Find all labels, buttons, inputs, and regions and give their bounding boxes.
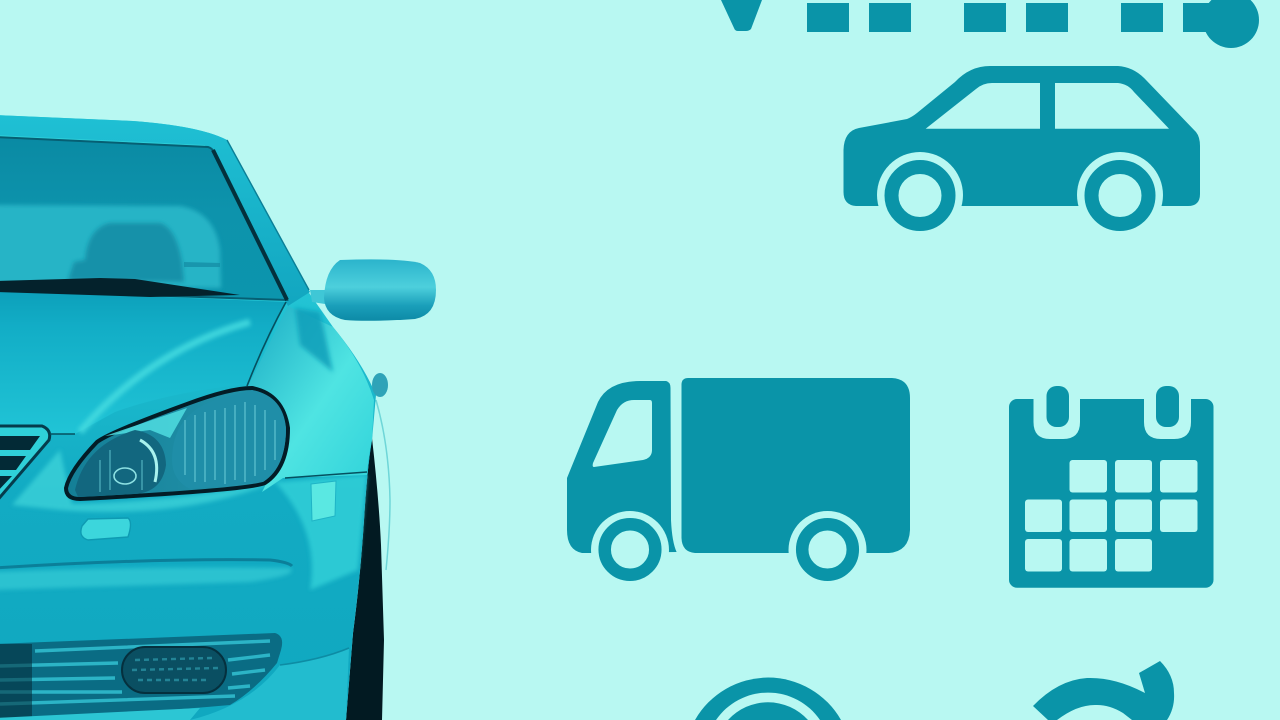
car body	[0, 115, 376, 720]
lower grille	[0, 633, 282, 718]
map pin tip	[721, 0, 762, 31]
fender side marker	[311, 481, 336, 521]
route line with pin and destination dot	[721, 0, 1259, 48]
date cells	[1025, 460, 1198, 572]
washer cover	[81, 518, 130, 540]
teal car photo	[0, 115, 436, 720]
lower fender light	[275, 475, 367, 590]
binder rings	[1046, 386, 1179, 427]
seat	[68, 223, 184, 282]
roof and pillar	[0, 115, 310, 306]
truck cargo box	[682, 378, 910, 553]
light band below headlight	[12, 450, 284, 512]
top grille	[0, 426, 50, 503]
wheel arch outline	[376, 400, 390, 570]
hood	[0, 290, 286, 434]
side marker	[372, 373, 388, 397]
fog lamp	[122, 647, 226, 693]
tyre	[346, 438, 384, 720]
windshield	[0, 137, 287, 300]
route dashes	[807, 3, 1213, 32]
icon: curved arrow, cropped	[1033, 661, 1174, 720]
icon: calendar	[1009, 386, 1214, 588]
lower lip	[190, 648, 349, 720]
icon: delivery truck	[567, 378, 910, 593]
hood seam	[247, 302, 286, 386]
icon: car	[844, 66, 1200, 238]
truck wheels	[605, 524, 853, 575]
rear window interior	[0, 205, 221, 288]
fender	[248, 306, 374, 492]
destination dot	[1203, 0, 1259, 48]
headlight	[66, 388, 288, 499]
mirror	[310, 259, 436, 321]
shoulder seams	[50, 434, 367, 478]
truck cab	[567, 381, 677, 553]
icon: concentric circle, cropped	[695, 678, 841, 720]
wheels	[892, 167, 1148, 224]
hood highlight	[80, 322, 250, 432]
bumper crease	[0, 560, 292, 568]
wiper	[0, 278, 240, 297]
